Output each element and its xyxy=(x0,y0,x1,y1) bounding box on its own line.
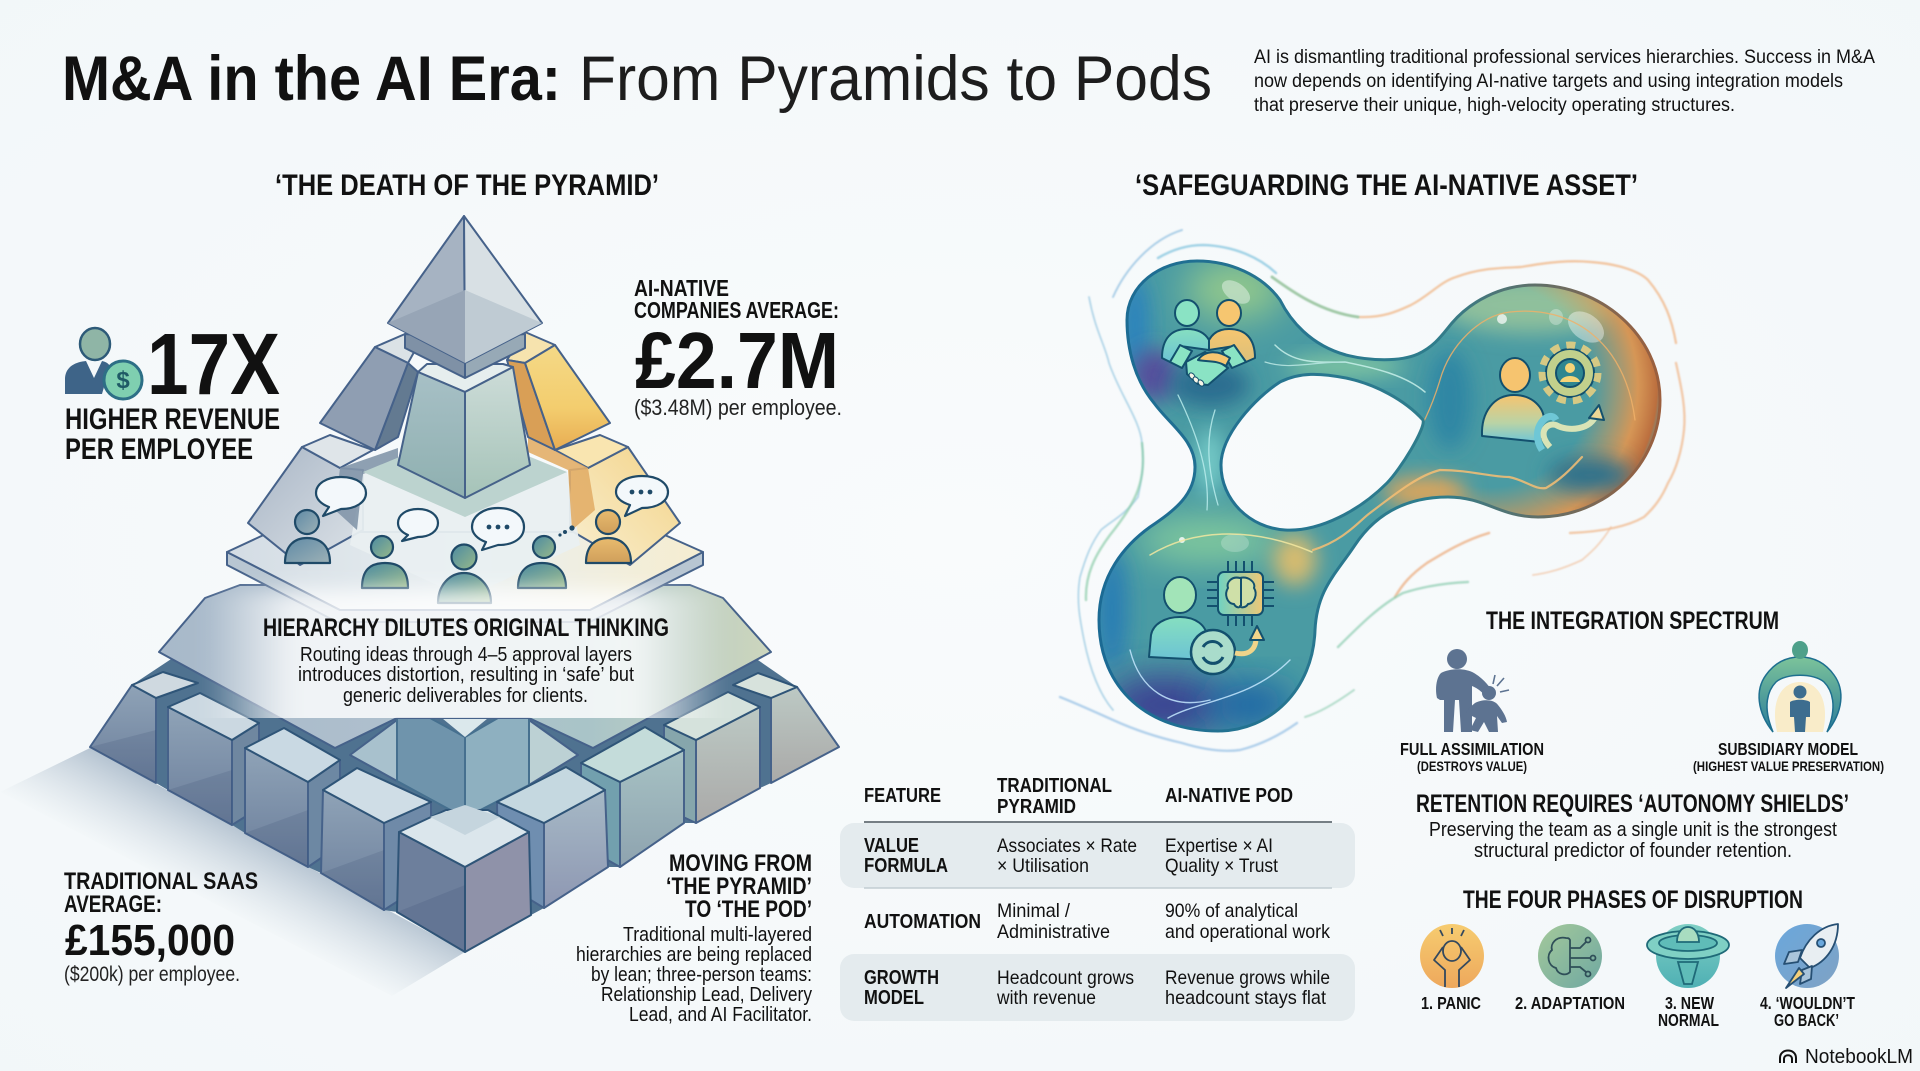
comparison table xyxy=(840,775,1355,1021)
text: hierarchy dilutes original thinking: introduces distortion, resulting in ‘safe’ but xyxy=(298,663,634,686)
row: growth model: GROWTH xyxy=(864,967,939,989)
heading: the integration spectrum: THE INTEGRATION SPECTRUM xyxy=(1486,607,1779,635)
spire shaft xyxy=(398,364,530,498)
phase labels: 4. ‘WOULDN’T xyxy=(1760,993,1855,1013)
heading: the four phases of disruption: THE FOUR PHASES OF DISRUPTION xyxy=(1463,886,1803,914)
phase labels: 2. ADAPTATION xyxy=(1515,993,1625,1013)
title: M&A in the AI Era: xyxy=(62,44,561,114)
block 2 right xyxy=(664,692,760,823)
text: hierarchy dilutes original thinking: HIERARCHY DILUTES ORIGINAL THINKING xyxy=(263,614,669,642)
pyramid base backing xyxy=(90,620,839,952)
text: retention requires autonomy shields xyxy=(1416,790,1849,862)
stat label: HIGHER REVENUE xyxy=(65,403,280,436)
icon: panic xyxy=(1420,924,1484,988)
translucent text panel xyxy=(205,590,725,740)
blob base xyxy=(1099,261,1660,731)
intro text block: that preserve their unique, high-velocity operating structures. xyxy=(1254,95,1735,116)
NotebookLM logo: NotebookLM xyxy=(1805,1046,1913,1068)
text: hierarchy dilutes original thinking: Routing ideas through 4–5 approval layers xyxy=(300,643,632,666)
text: subsidiary model: SUBSIDIARY MODEL xyxy=(1718,739,1858,759)
row: value formula: FORMULA xyxy=(864,855,948,877)
text: hierarchy dilutes original thinking xyxy=(263,614,669,707)
title: From Pyramids to Pods xyxy=(579,44,1212,114)
callout: AI-native average: COMPANIES AVERAGE: xyxy=(634,297,839,323)
row: automation: and operational work xyxy=(1165,921,1330,943)
callout: moving from the pyramid to the pod: hierarchies are being replaced xyxy=(576,943,812,966)
block 4 left xyxy=(321,768,431,910)
third tier xyxy=(248,435,680,565)
callout: moving from the pyramid to the pod: ‘THE PYRAMID’ xyxy=(666,873,812,900)
callout: traditional SaaS average: ($200k) per employee. xyxy=(64,963,240,986)
platform tier xyxy=(227,532,703,622)
icon: person with AI chip and refresh xyxy=(1149,561,1274,674)
callout: moving from the pyramid to the pod xyxy=(576,850,813,1026)
blob highlights xyxy=(1179,275,1610,552)
phase labels: 3. NEW xyxy=(1665,993,1714,1013)
text: full assimilation: FULL ASSIMILATION xyxy=(1400,739,1544,759)
row: value formula: × Utilisation xyxy=(997,855,1089,877)
row: automation: Administrative xyxy=(997,921,1110,943)
callout: moving from the pyramid to the pod: Relationship Lead, Delivery xyxy=(601,983,813,1006)
callout: traditional SaaS average: £155,000 xyxy=(65,916,235,965)
icon: subsidiary model shield xyxy=(1759,641,1841,732)
icon: full assimilation xyxy=(1436,649,1509,732)
icon: person with gear and growth arrow xyxy=(1482,345,1604,450)
heading: safeguarding the AI-native asset: ‘SAFEGUARDING THE AI-NATIVE ASSET’ xyxy=(1135,169,1638,202)
intro text block: now depends on identifying AI-native targets and using integration models xyxy=(1254,71,1843,92)
callout: moving from the pyramid to the pod: Lead, and AI Facilitator. xyxy=(629,1003,812,1026)
stat label xyxy=(65,403,280,466)
row: growth model: with revenue xyxy=(996,987,1096,1009)
block 2 left xyxy=(168,693,259,825)
speech bubble 2 xyxy=(398,509,438,541)
row: value formula: Expertise × AI xyxy=(1165,835,1273,857)
block 3 left xyxy=(245,728,340,867)
spire collar xyxy=(405,334,525,378)
front block xyxy=(397,805,531,952)
table header xyxy=(864,775,1293,818)
phase labels: 1. PANIC xyxy=(1421,993,1481,1013)
wide tier behind panel xyxy=(159,585,771,748)
text: subsidiary model xyxy=(1693,739,1884,774)
text: full assimilation: (DESTROYS VALUE) xyxy=(1417,758,1527,774)
pyramid illustration xyxy=(0,216,839,996)
pod network blobs xyxy=(1096,209,1666,735)
stat label: PER EMPLOYEE xyxy=(65,433,253,466)
icon: person with dollar coin: $ xyxy=(116,367,130,394)
central rear block xyxy=(350,700,578,818)
blob outline xyxy=(1099,261,1660,731)
base row of glass blocks xyxy=(90,672,839,952)
icon: person with dollar coin xyxy=(65,328,142,399)
icon: new normal xyxy=(1647,924,1729,988)
intro text block: AI is dismantling traditional professional services hierarchies. Success in M&A xyxy=(1254,47,1875,68)
text: hierarchy dilutes original thinking: generic deliverables for clients. xyxy=(343,684,588,707)
text: full assimilation xyxy=(1400,739,1544,774)
block far right xyxy=(733,673,839,783)
row: automation: 90% of analytical xyxy=(1165,900,1298,922)
block 3 right xyxy=(581,727,684,867)
callout: AI-native average xyxy=(634,275,842,420)
icon: handshake pair xyxy=(1162,300,1255,387)
phase labels: NORMAL xyxy=(1658,1010,1719,1030)
stat 17X: 17X xyxy=(147,316,280,413)
pyramid ground shadow xyxy=(0,748,465,996)
phase labels xyxy=(1421,993,1855,1030)
person 2 xyxy=(362,536,408,588)
callout: moving from the pyramid to the pod: Traditional multi-layered xyxy=(623,923,812,946)
spire top xyxy=(388,216,542,363)
intro text block xyxy=(1254,47,1875,116)
row: automation: AUTOMATION xyxy=(864,911,981,933)
icon: rocket xyxy=(1775,924,1839,988)
person 4 xyxy=(518,536,566,588)
text: retention requires autonomy shields: Preserving the team as a single unit is the strongest xyxy=(1429,818,1837,841)
callout: AI-native average: £2.7M xyxy=(635,316,839,405)
wisps around pod network xyxy=(1060,230,1685,751)
row: value formula: Quality × Trust xyxy=(1165,855,1279,877)
row: automation xyxy=(864,900,1330,943)
title xyxy=(62,44,1212,114)
speech bubble 3 xyxy=(472,508,524,550)
row: growth model: headcount stays flat xyxy=(1165,987,1327,1009)
speech bubble 1 xyxy=(316,477,366,516)
callout: moving from the pyramid to the pod: MOVING FROM xyxy=(669,850,812,877)
row: growth model: MODEL xyxy=(864,987,924,1009)
text: subsidiary model: (HIGHEST VALUE PRESERVATION) xyxy=(1693,758,1884,774)
table header: AI-NATIVE POD xyxy=(1165,785,1293,807)
callout: traditional SaaS average: AVERAGE: xyxy=(64,891,162,918)
thought dots xyxy=(558,525,575,537)
icon: adaptation xyxy=(1538,924,1602,988)
callout: traditional SaaS average: TRADITIONAL SAAS xyxy=(64,868,258,895)
row: value formula: Associates × Rate xyxy=(997,835,1137,857)
block 4 right xyxy=(497,767,608,908)
callout: 17X higher revenue xyxy=(65,316,280,466)
block far left xyxy=(90,672,198,783)
block lower glass facets xyxy=(90,730,465,952)
blob filaments xyxy=(1130,311,1635,718)
person 3 xyxy=(438,544,491,603)
row: growth model: Headcount grows xyxy=(997,967,1134,989)
row: growth model xyxy=(840,954,1355,1021)
callout: moving from the pyramid to the pod: by lean; three-person teams: xyxy=(591,963,812,986)
third tier inner strips and floor xyxy=(335,430,595,598)
callout: traditional SaaS average xyxy=(64,868,258,986)
person 1 xyxy=(285,510,330,563)
callout: AI-native average: ($3.48M) per employee. xyxy=(634,395,842,420)
blob glows xyxy=(1100,262,1658,730)
team of people with speech bubbles xyxy=(285,476,668,603)
row: value formula xyxy=(840,823,1355,888)
upper wedges xyxy=(320,332,610,450)
phase labels: GO BACK’ xyxy=(1774,1010,1839,1030)
person 5 xyxy=(586,510,631,563)
table header: PYRAMID xyxy=(997,796,1076,818)
callout: moving from the pyramid to the pod: TO ‘THE POD’ xyxy=(685,896,812,923)
table header: FEATURE xyxy=(864,785,941,807)
speech bubble 4 xyxy=(616,476,668,516)
row: value formula: VALUE xyxy=(864,835,919,857)
text: retention requires autonomy shields: structural predictor of founder retention. xyxy=(1474,839,1792,862)
row: automation: Minimal / xyxy=(997,900,1071,922)
callout: AI-native average: AI-NATIVE xyxy=(634,275,729,301)
row: growth model: Revenue grows while xyxy=(1165,967,1330,989)
table header: TRADITIONAL xyxy=(997,775,1112,797)
heading: the death of the pyramid: ‘THE DEATH OF THE PYRAMID’ xyxy=(275,169,659,202)
